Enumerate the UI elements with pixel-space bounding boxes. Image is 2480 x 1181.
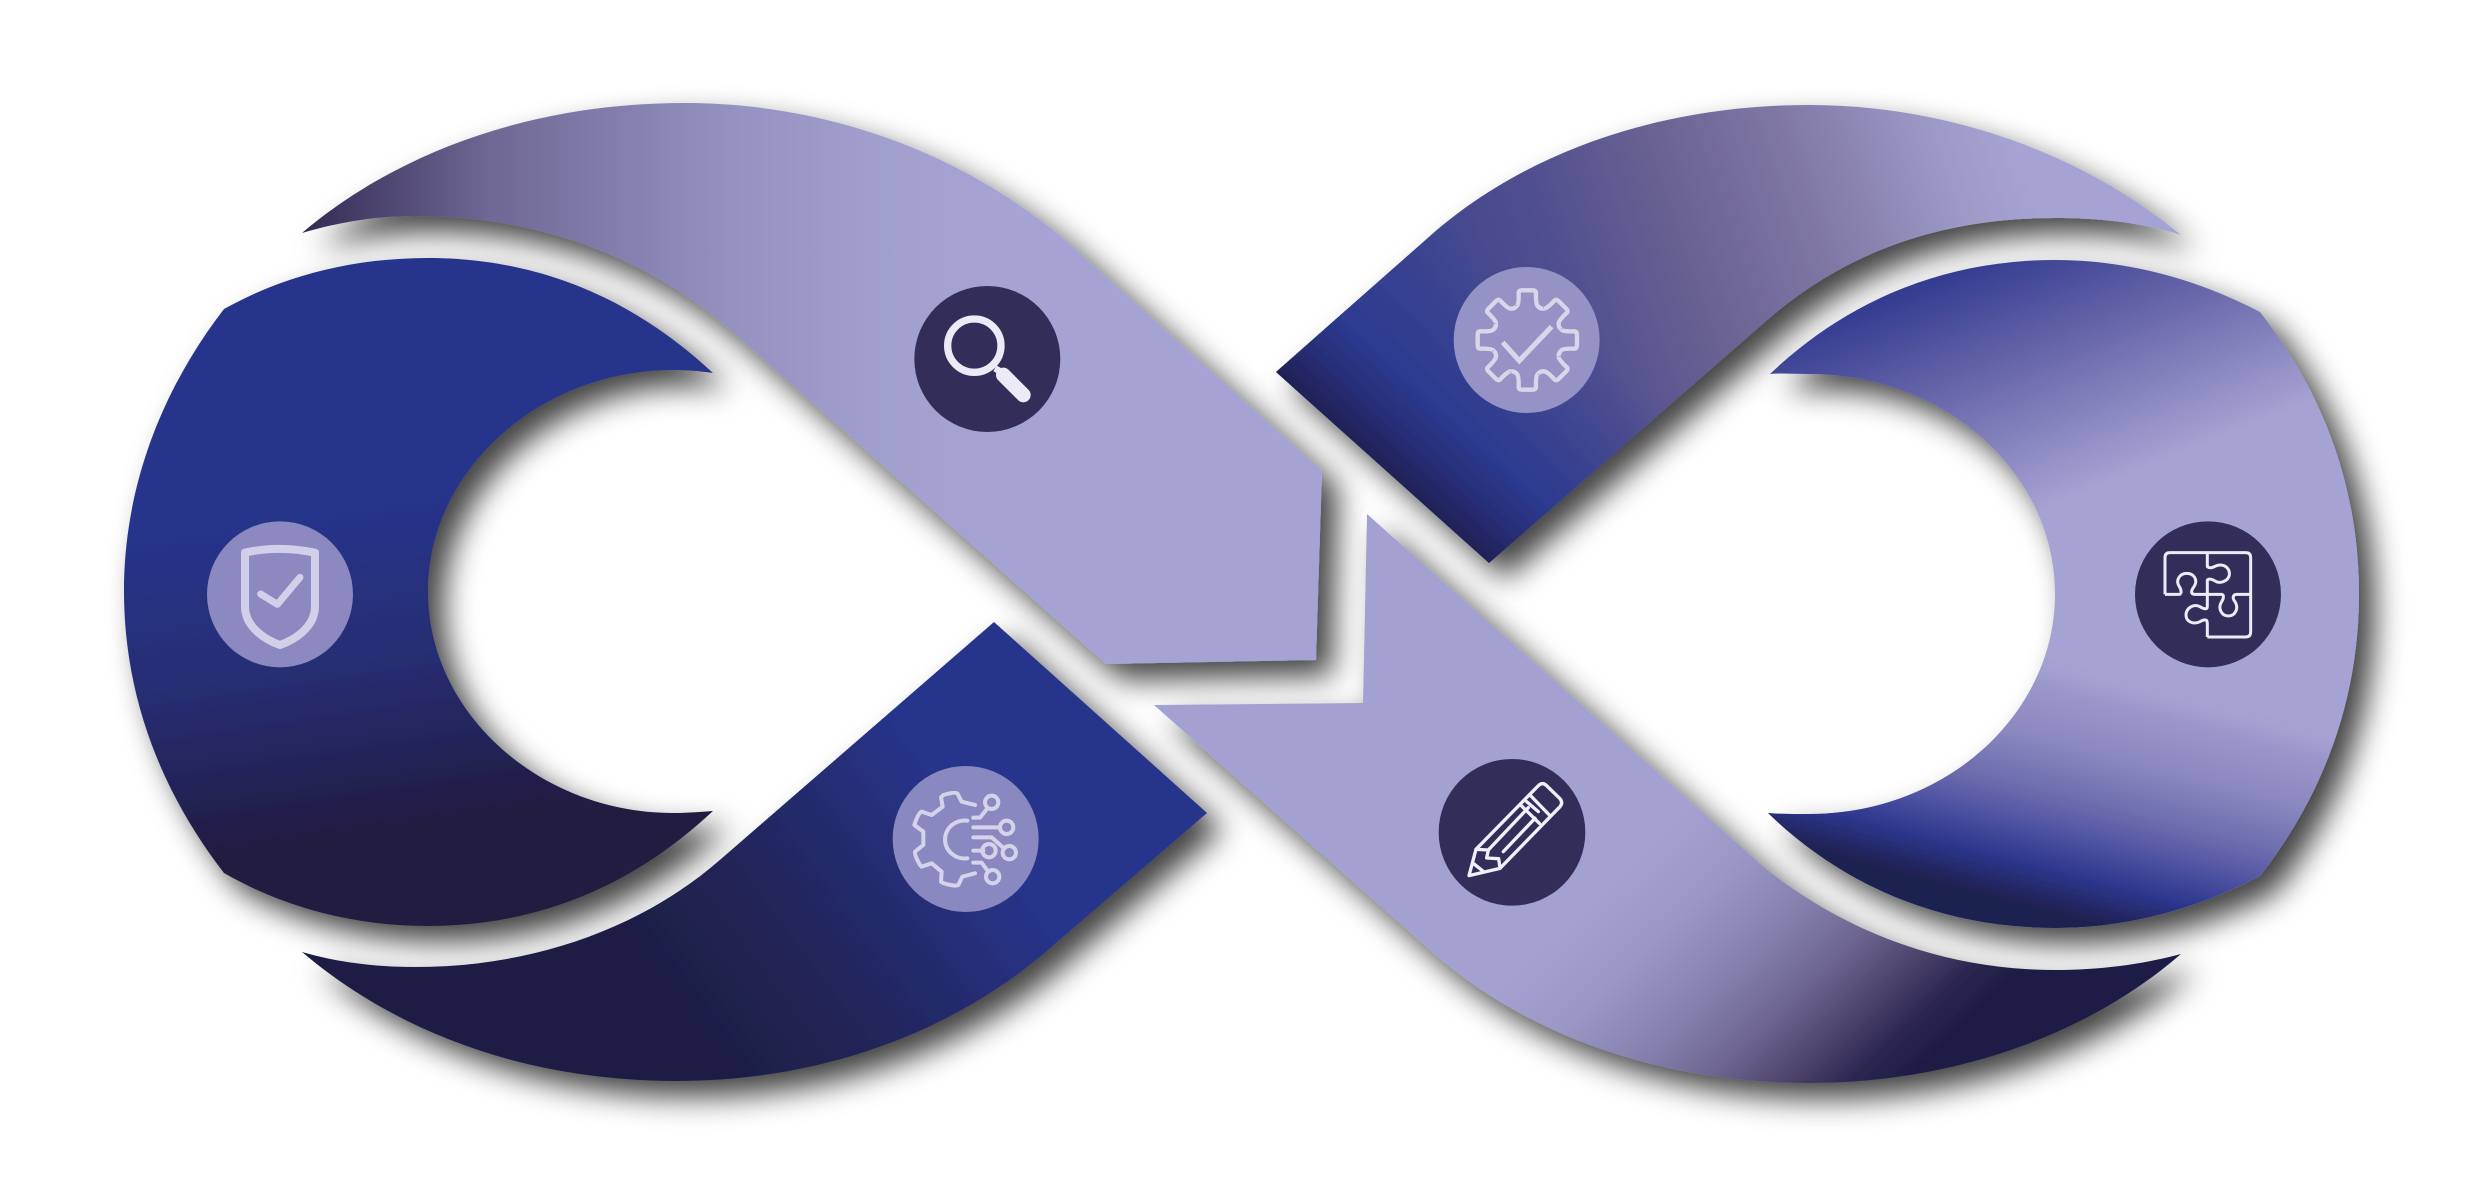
- icon: puzzle pieces: [2135, 521, 2281, 667]
- segment: bottom-left band: [302, 622, 1207, 1081]
- segment: bottom-right band: [1154, 514, 2181, 1083]
- segment: top-left band: [302, 103, 1322, 664]
- segment: left crescent: [124, 258, 713, 926]
- icon: magnifying glass: [914, 286, 1060, 432]
- segment: right crescent: [1768, 260, 2359, 928]
- icon: pencil: [1439, 759, 1585, 906]
- segment: top-right band: [1276, 105, 2181, 563]
- icon: gear with check: [1454, 267, 1600, 413]
- icon: gear with circuit nodes: [893, 766, 1039, 912]
- icon: shield with check: [207, 521, 353, 667]
